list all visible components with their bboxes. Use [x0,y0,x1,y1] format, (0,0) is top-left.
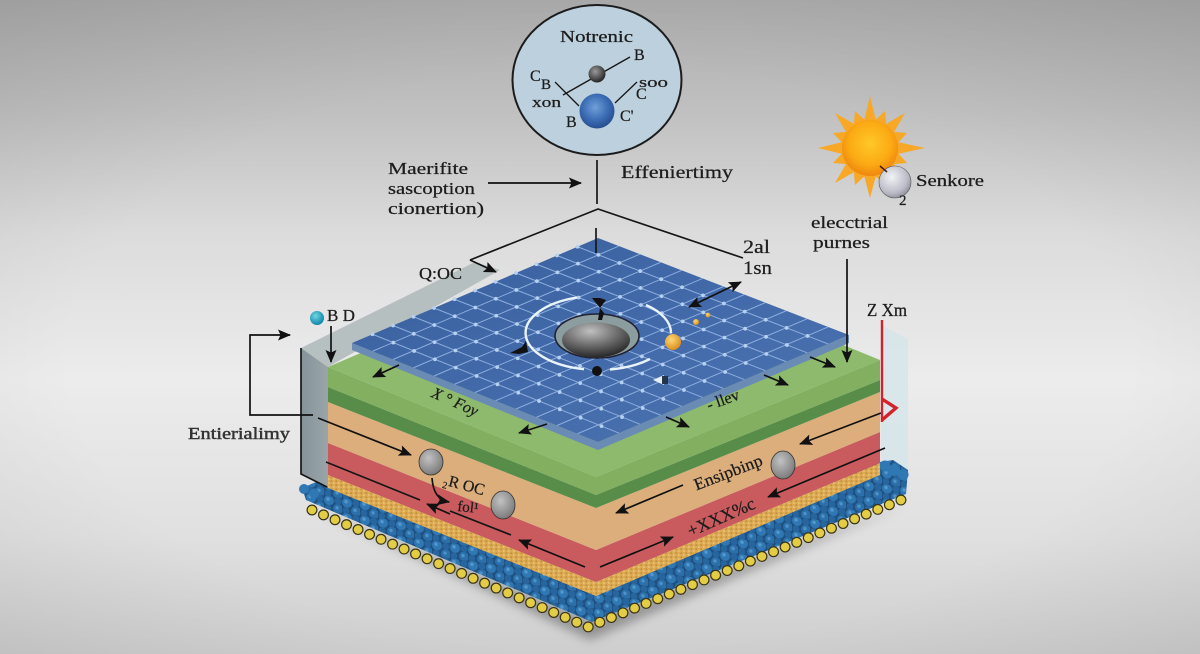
label: B D with teal dot and arrow [310,306,355,362]
bracket arrow: Entierialimy: Entierialimy [188,424,291,443]
carrier spheres [419,449,795,519]
left gray wall [301,262,500,487]
icon: sun [818,96,925,198]
panel grid [372,246,828,434]
atom labels: C' [620,108,634,125]
atom labels: B [566,114,577,131]
small dark atom [588,66,606,82]
atom labels: Notrenic [560,27,634,46]
label: Senkore: Senkore [916,171,984,190]
layer: green top [328,248,880,477]
label: electrical purnes with arrow: purnes [813,233,870,252]
atom labels [530,27,668,131]
layer labels: X ° Foy [428,384,481,421]
label: B D with teal dot and arrow: B D [327,306,355,325]
large blue atom [580,94,614,128]
layer labels: ₂R OC [441,472,487,499]
central hole [555,314,639,358]
layer: dark green [328,380,880,508]
layer: tan [328,392,880,550]
layer: blue particle bed [302,460,908,622]
layer labels: fol¹ [457,499,479,517]
layer: sand [328,463,880,596]
label: Effeniertimy: Effeniertimy [621,162,733,182]
layer: yellow particle row [312,500,901,627]
atom labels: xon [532,95,562,111]
icon: silver sphere [879,166,911,209]
layer labels: +XXX%c [684,493,758,541]
callout: Maerifite: cionertion) [388,199,484,218]
inset circle: molecule detail [512,5,682,155]
solar panel [352,238,849,450]
panel edge [352,335,849,450]
atom labels: C [530,68,541,85]
layered stack [302,248,908,627]
label: electrical purnes with arrow [811,213,888,362]
atom labels: B [541,77,551,93]
layer flow arrows [318,413,885,567]
label: 2al 1sn with arrow [689,237,773,307]
bond lines [555,57,637,106]
layer labels: - llev [705,387,742,414]
connector from inset to panel [470,160,743,272]
callout: Maerifite: Maerifite [388,159,468,178]
label: Q:OC: Q:OC [419,264,462,283]
layer labels: Ensipbinp [691,451,765,494]
dark markers on panel [510,298,668,385]
ground shadow [306,505,905,640]
atom labels: soo [639,75,668,91]
callout: Maerifite [388,159,581,218]
orbit ring [526,298,671,370]
right translucent wall [881,325,908,475]
green layer arrows [373,357,835,433]
layer: red [328,432,880,582]
atom labels: C [636,86,647,103]
atom labels: B [634,47,645,64]
label: 2al 1sn with arrow: 1sn [743,258,773,279]
panel surface [352,238,849,442]
label: Z Xm with red marker [867,300,907,422]
orange particles [665,313,710,350]
bracket arrow: Entierialimy [188,335,313,443]
layer: light green side [328,360,880,495]
layer labels [428,384,765,541]
icon: silver sphere: 2 [899,193,906,209]
label: Z Xm with red marker: Z Xm [867,300,907,320]
label: 2al 1sn with arrow: 2al [743,237,770,258]
label: electrical purnes with arrow: elecctrial [811,213,888,232]
callout: Maerifite: sascoption [388,179,476,198]
